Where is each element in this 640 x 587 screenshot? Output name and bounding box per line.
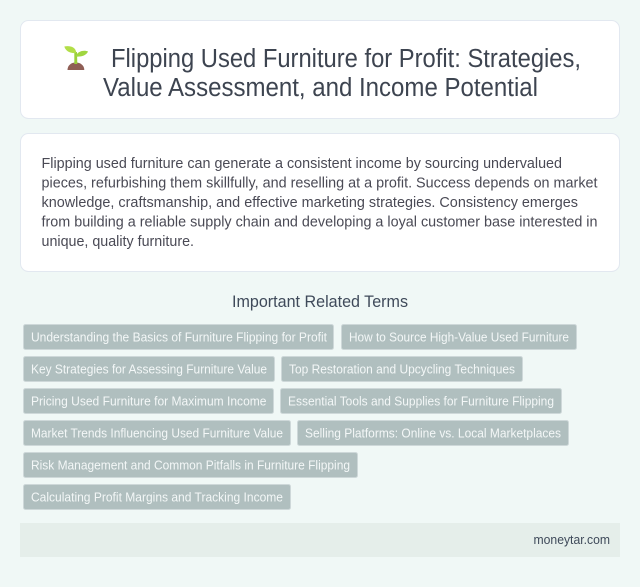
description panel <box>20 134 620 272</box>
title text: Flipping Used Furniture for Profit: Strategies, <box>111 45 581 73</box>
description text: Flipping used furniture can generate a consistent income by sourcing undervalued <box>42 155 562 172</box>
tag: profit margins: Calculating Profit Margins and Tracking Income <box>31 490 283 504</box>
tag: restoration: Top Restoration and Upcycling Techniques <box>289 362 515 376</box>
tag: sourcing <box>342 324 576 350</box>
icon: seedling <box>64 46 88 70</box>
description text <box>42 155 598 250</box>
tag: restoration <box>282 356 522 382</box>
tag: selling platforms: Selling Platforms: Online vs. Local Marketplaces <box>305 426 561 440</box>
description text: pieces, refurbishing them skillfully, and reselling at a profit. Success depends on market <box>42 174 598 192</box>
title text <box>103 45 581 102</box>
tag: tools: Essential Tools and Supplies for Furniture Flipping <box>288 394 554 408</box>
tag: profit margins <box>24 484 290 510</box>
tag: risk management: Risk Management and Common Pitfalls in Furniture Flipping <box>31 458 350 472</box>
tag: basics: Understanding the Basics of Furniture Flipping for Profit <box>31 330 327 344</box>
heading: important related terms: Important Related Terms <box>232 293 408 311</box>
tag: assessing value <box>24 356 274 382</box>
description text: from building a reliable supply chain and developing a loyal customer base interested in <box>42 214 598 230</box>
tag: market trends <box>24 420 290 446</box>
tag: selling platforms <box>298 420 568 446</box>
related terms tags <box>24 324 576 510</box>
tag: market trends: Market Trends Influencing Used Furniture Value <box>31 426 283 440</box>
title panel <box>20 20 620 118</box>
tag: pricing <box>24 388 274 414</box>
tag: pricing: Pricing Used Furniture for Maximum Income <box>31 394 266 408</box>
tag: basics <box>24 324 334 350</box>
tag: sourcing: How to Source High-Value Used Furniture <box>349 330 569 344</box>
tag: risk management <box>24 452 358 478</box>
description text: knowledge, craftsmanship, and effective marketing strategies. Consistency emerges <box>42 194 578 211</box>
footer <box>20 523 620 557</box>
title text: Value Assessment, and Income Potential <box>103 74 538 102</box>
footer source text: moneytar.com <box>534 533 610 547</box>
description text: unique, quality furniture. <box>42 233 194 250</box>
tag: assessing value: Key Strategies for Assessing Furniture Value <box>31 362 267 376</box>
tag: tools <box>280 388 562 414</box>
